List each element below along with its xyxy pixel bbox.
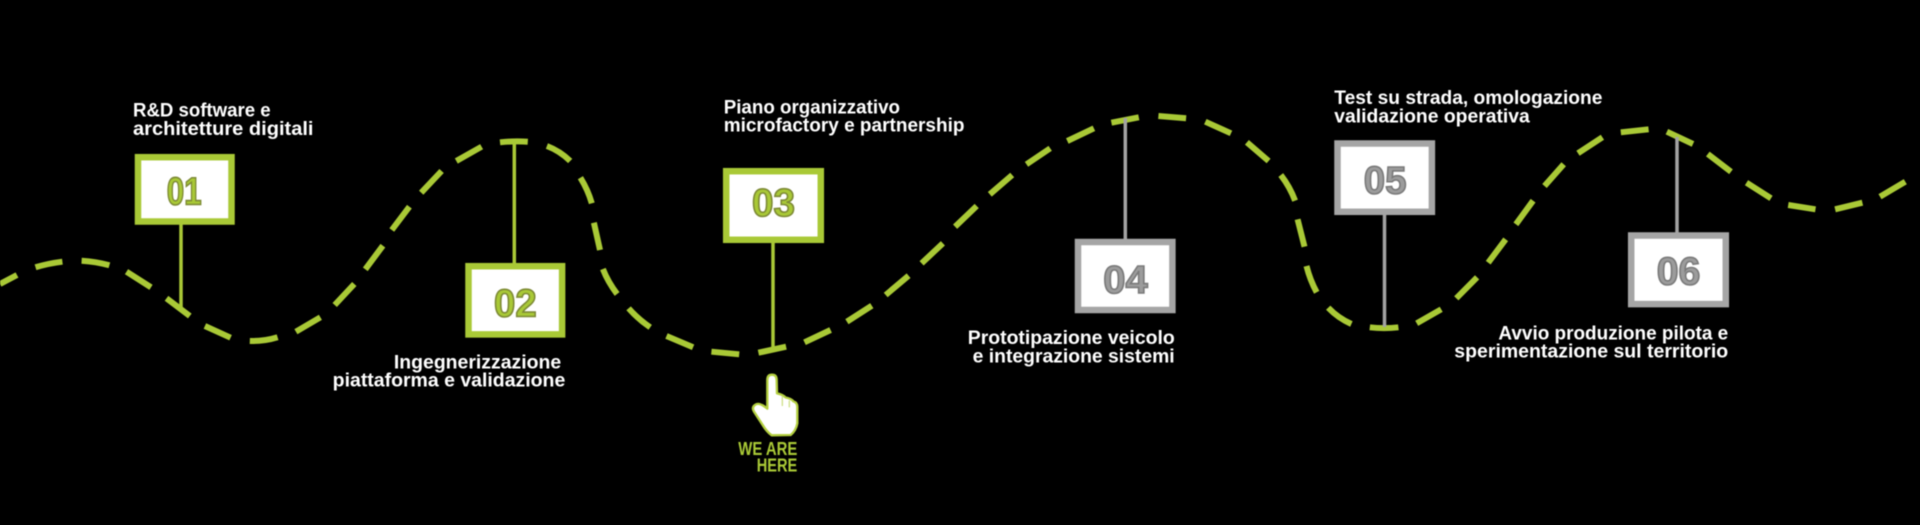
number 05: 05: [1364, 160, 1406, 203]
milestone 03: [724, 97, 964, 347]
connector 05: [1383, 215, 1386, 327]
label 05: [1334, 88, 1602, 127]
number 06: 06: [1657, 250, 1700, 293]
number 02: 02: [494, 282, 537, 325]
number box 01: [138, 157, 232, 222]
connector 02: [513, 142, 516, 264]
milestone 06: [1454, 137, 1728, 363]
number 03: 03: [752, 182, 795, 225]
label 04: Prototipazione veicolo: [968, 328, 1175, 349]
milestone 02: [333, 142, 565, 392]
number box 03: [726, 171, 821, 240]
label 01: R&D software e: [133, 101, 271, 122]
label 05: Test su strada, omologazione: [1334, 88, 1602, 109]
we are here text: WE ARE: [738, 438, 797, 459]
we are here text: HERE: [757, 455, 797, 476]
icon: pointing hand: [753, 375, 797, 435]
milestone 01: [133, 101, 314, 307]
milestone 05: [1334, 88, 1602, 327]
we are here text: [738, 438, 797, 476]
number box 02: [468, 266, 562, 334]
label 02: Ingegnerizzazione: [394, 352, 561, 373]
label 03: [724, 97, 964, 137]
connector 03: [771, 243, 775, 347]
milestone 04: [968, 118, 1175, 367]
label 06: Avvio produzione pilota e: [1498, 323, 1728, 344]
label 03: microfactory e partnership: [724, 116, 964, 137]
number 01: 01: [167, 170, 202, 213]
label 04: [968, 328, 1175, 367]
label 05: validazione operativa: [1334, 106, 1530, 127]
label 03: Piano organizzativo: [724, 97, 900, 118]
label 06: sperimentazione sul territorio: [1454, 342, 1728, 363]
connector 01: [179, 224, 183, 307]
label 02: [333, 352, 565, 392]
number box 06: [1631, 236, 1726, 304]
label 06: [1454, 323, 1728, 363]
label 02: piattaforma e validazione: [333, 371, 565, 392]
number box 04: [1078, 242, 1172, 310]
label 04: e integrazione sistemi: [973, 346, 1175, 367]
we are here marker: [738, 375, 797, 476]
label 01: [133, 101, 314, 140]
dashed timeline curve: [0, 116, 1905, 354]
number 04: 04: [1103, 259, 1148, 302]
connector 06: [1675, 137, 1679, 233]
label 01: architetture digitali: [133, 119, 314, 140]
number box 05: [1338, 144, 1432, 212]
connector 04: [1124, 118, 1127, 239]
